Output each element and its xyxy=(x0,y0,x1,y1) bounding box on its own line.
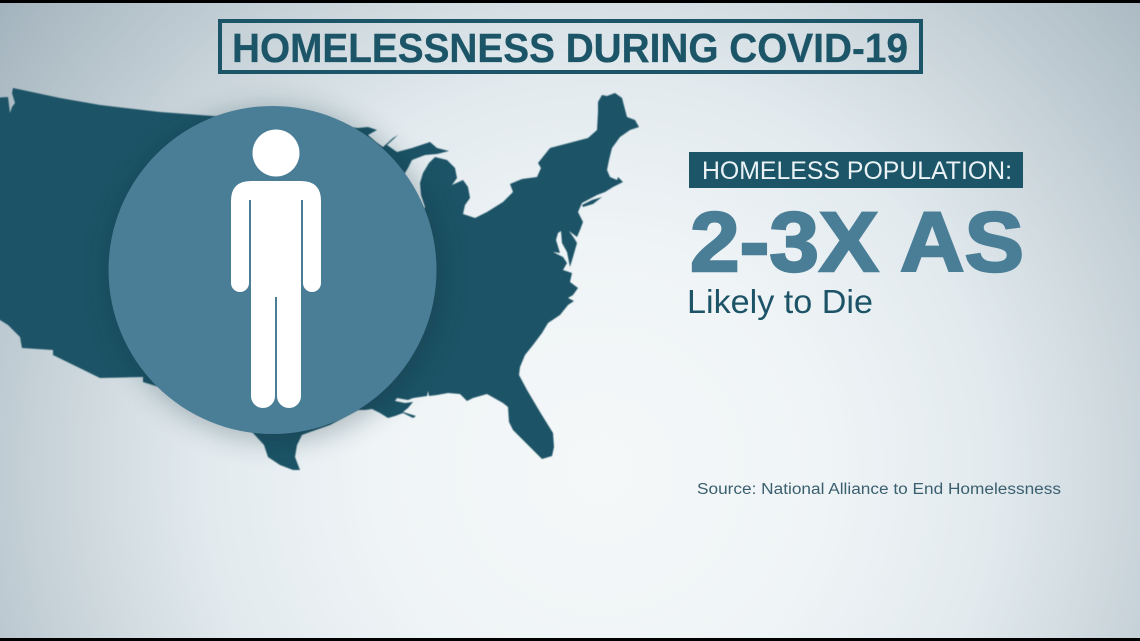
icon: person xyxy=(231,130,321,408)
map: Long Island xyxy=(582,197,602,207)
statistic: 2-3X AS xyxy=(690,195,1024,289)
circle shadow xyxy=(110,108,442,440)
map: continental United States xyxy=(0,88,639,470)
subheading: Likely to Die xyxy=(687,283,873,320)
title: HOMELESSNESS DURING COVID-19 xyxy=(232,25,908,71)
label: homeless population: HOMELESS POPULATION: xyxy=(702,157,1012,185)
source: Source: National Alliance to End Homelessness xyxy=(697,481,1061,498)
circle with person icon xyxy=(108,106,436,434)
